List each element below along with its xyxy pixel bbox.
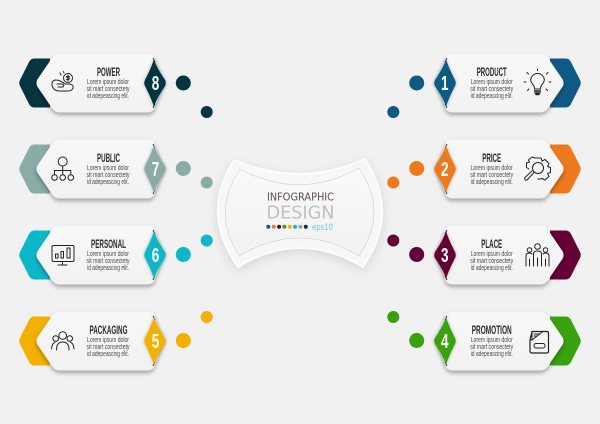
number: 4 xyxy=(441,331,449,353)
chevron xyxy=(19,144,50,194)
panel: 4 promotion xyxy=(434,312,581,370)
icon: team xyxy=(526,244,549,266)
body text: sit mart consectety xyxy=(470,170,513,179)
body text: sit mart consectety xyxy=(86,342,130,351)
number diamond xyxy=(144,145,166,193)
heading line 2: DESIGN xyxy=(266,202,334,224)
panel: 3 place xyxy=(434,226,581,284)
number: 1 xyxy=(441,73,448,95)
body text xyxy=(470,77,513,100)
number diamond xyxy=(434,59,456,107)
body text: Lorem ipsum dolor xyxy=(87,335,129,344)
body text: id adepeascing elit. xyxy=(471,349,513,358)
body text: id adepeascing elit. xyxy=(87,349,129,358)
panel: 8 power xyxy=(19,54,166,112)
body text: Lorem ipsum dolor xyxy=(87,163,129,172)
badge inner outline xyxy=(225,168,374,256)
chevron xyxy=(19,230,50,280)
card xyxy=(36,226,164,284)
panel: 2 price xyxy=(434,140,581,198)
chevron xyxy=(550,316,581,366)
number diamond xyxy=(434,231,456,279)
title: PROMOTION xyxy=(472,325,512,337)
body text: sit mart consectety xyxy=(86,170,130,179)
chevron xyxy=(19,316,50,366)
panel: 7 public xyxy=(19,140,166,198)
body text xyxy=(470,163,513,186)
chevron xyxy=(550,58,581,108)
title: PUBLIC xyxy=(97,153,120,165)
connector dots 5 xyxy=(176,311,213,348)
number: 2 xyxy=(441,159,448,181)
number: 6 xyxy=(152,245,159,267)
number: 7 xyxy=(152,159,159,181)
chevron xyxy=(550,144,581,194)
title: PACKAGING xyxy=(90,325,128,337)
title: POWER xyxy=(97,67,120,79)
body text: id adepeascing elit. xyxy=(471,91,513,100)
connector dots 3 xyxy=(387,234,424,262)
number diamond xyxy=(434,317,456,365)
panel: 5 packaging xyxy=(19,312,166,370)
icon: light bulb xyxy=(524,69,551,94)
badge outer shape xyxy=(218,159,382,267)
body text xyxy=(86,77,130,100)
card xyxy=(436,312,564,370)
body text: sit mart consectety xyxy=(470,342,513,351)
icon: document xyxy=(530,332,548,353)
body text xyxy=(470,335,513,358)
body text: sit mart consectety xyxy=(86,84,130,93)
icon: gear and magnifier xyxy=(525,157,550,180)
number: 5 xyxy=(152,331,159,353)
body text xyxy=(86,335,130,358)
number diamond xyxy=(144,317,166,365)
panel: 1 product xyxy=(434,54,581,112)
card xyxy=(436,140,564,198)
card xyxy=(36,54,164,112)
body text: sit mart consectety xyxy=(470,256,513,265)
heading line 1: INFOGRAPHIC xyxy=(267,190,334,204)
number diamond xyxy=(144,231,166,279)
icon: network xyxy=(52,157,74,180)
body text xyxy=(86,163,130,186)
connector dots 7 xyxy=(176,161,213,188)
connector dots 6 xyxy=(176,234,213,262)
body text xyxy=(470,249,513,272)
card xyxy=(436,226,564,284)
card xyxy=(436,54,564,112)
body text: id adepeascing elit. xyxy=(471,263,513,272)
title: PERSONAL xyxy=(91,239,126,251)
number: 3 xyxy=(441,245,448,267)
number diamond xyxy=(144,59,166,107)
body text: id adepeascing elit. xyxy=(471,177,513,186)
panel: central badge xyxy=(218,159,382,267)
chevron xyxy=(19,58,50,108)
connector dots 4 xyxy=(387,311,424,348)
connector dots 8 xyxy=(176,76,213,118)
connector dots 2 xyxy=(387,161,424,188)
card xyxy=(36,312,164,370)
body text: Lorem ipsum dolor xyxy=(471,163,513,172)
card xyxy=(36,140,164,198)
body text: sit mart consectety xyxy=(470,84,513,93)
body text: Lorem ipsum dolor xyxy=(87,77,129,86)
body text: Lorem ipsum dolor xyxy=(471,77,513,86)
body text: id adepeascing elit. xyxy=(87,177,129,186)
panel: 6 personal xyxy=(19,226,166,284)
icon: group of people xyxy=(52,332,74,350)
title: PLACE xyxy=(481,239,502,251)
colour dots xyxy=(266,225,308,229)
body text: sit mart consectety xyxy=(86,256,130,265)
body text: id adepeascing elit. xyxy=(87,91,129,100)
icon: monitor chart xyxy=(52,246,74,265)
body text xyxy=(86,249,130,272)
chevron xyxy=(550,230,581,280)
body text: Lorem ipsum dolor xyxy=(471,335,513,344)
title: PRODUCT xyxy=(477,67,507,79)
body text: id adepeascing elit. xyxy=(87,263,129,272)
eps10 label: eps10 xyxy=(312,223,333,233)
connector dots 1 xyxy=(387,76,424,118)
body text: Lorem ipsum dolor xyxy=(87,249,129,258)
number: 8 xyxy=(152,73,159,95)
title: PRICE xyxy=(482,153,501,165)
icon: hand with coin xyxy=(52,72,73,91)
body text: Lorem ipsum dolor xyxy=(471,249,513,258)
number diamond xyxy=(434,145,456,193)
